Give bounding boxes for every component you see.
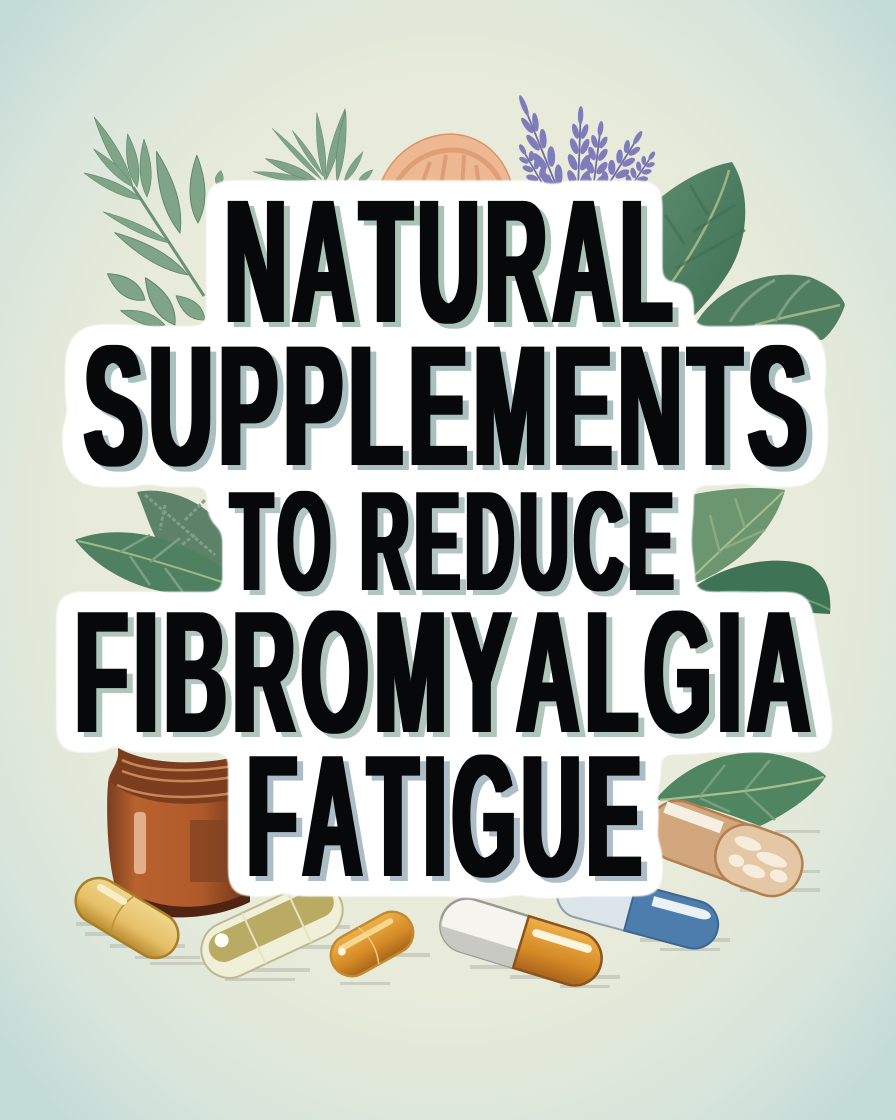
capsule: white and orange: [434, 892, 608, 992]
illustration: top rosemary sprig: [252, 108, 375, 185]
capsule: clear with gold fill: [192, 873, 352, 987]
title text: [75, 164, 816, 913]
illustration: lavender: [507, 90, 664, 197]
illustration: left middle foliage: [75, 491, 225, 596]
capsule: small orange: [323, 904, 421, 984]
title shadow: [81, 169, 822, 918]
illustration: bottom right leaf: [655, 752, 826, 826]
title: [75, 164, 822, 918]
capsule: tan powder: [639, 792, 811, 904]
illustration: peach shell: [378, 134, 513, 192]
capsule: yellow: [67, 869, 187, 967]
illustration: capsule shadows: [76, 830, 820, 988]
capsule: blue: [552, 865, 723, 954]
illustration: left rosemary sprig: [82, 115, 225, 331]
illustration: top right leaves: [660, 162, 845, 340]
illustration: right middle leaves: [670, 488, 830, 614]
illustration: amber jar: [107, 748, 250, 917]
sticker backing: white outline behind title: [75, 164, 816, 913]
